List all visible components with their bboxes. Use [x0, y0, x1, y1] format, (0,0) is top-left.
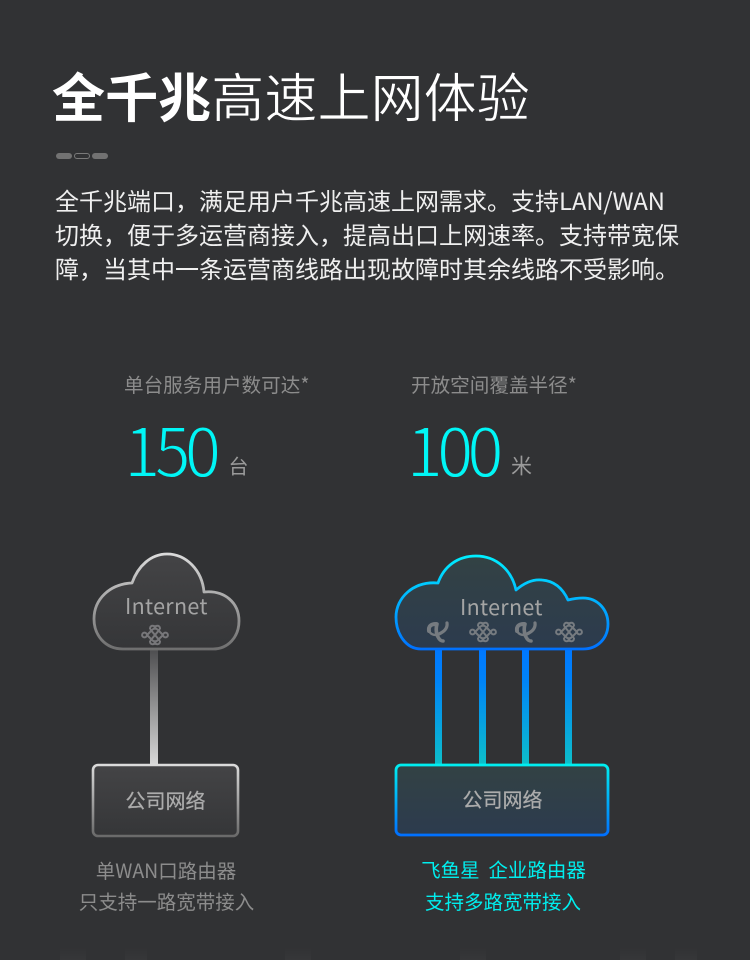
- faint bottom glow: [60, 947, 697, 960]
- caption: enterprise router: [421, 854, 586, 915]
- stat: open-space coverage radius: 开放空间覆盖半径*: [411, 369, 577, 398]
- stat: users per device: 单台服务用户数可达*: [124, 369, 310, 398]
- cloud label: Internet: [460, 591, 543, 622]
- diagram: multi-WAN router: [396, 556, 608, 835]
- connection line: single link: [150, 650, 158, 764]
- box: company network: [93, 765, 238, 836]
- box label: 公司网络: [462, 784, 542, 813]
- box label: 公司网络: [126, 785, 206, 814]
- caption: single WAN: [79, 855, 254, 915]
- title: 全千兆高速上网体验: [52, 56, 530, 133]
- stat: users per device: 150: [124, 398, 219, 497]
- stat: users per device: 台: [228, 450, 248, 480]
- cloud label: Internet: [125, 590, 208, 621]
- stat: open-space coverage radius: 100: [406, 398, 501, 497]
- caption: single WAN: 单WAN口路由器: [96, 855, 236, 884]
- intro paragraph: [55, 182, 679, 285]
- connection lines: four links: [435, 650, 572, 764]
- cloud: multi-line internet: [396, 556, 608, 649]
- icon: knot logo: [142, 626, 168, 644]
- diagram: single WAN router: [93, 554, 239, 836]
- caption: enterprise router: 飞鱼星 企业路由器: [421, 854, 586, 883]
- title pagination marks: [56, 153, 108, 159]
- stat: open-space coverage radius: 米: [511, 450, 532, 480]
- stat: users per device: [124, 369, 310, 497]
- caption: single WAN: 只支持一路宽带接入: [79, 886, 254, 915]
- intro paragraph: 全千兆端口，满足用户千兆高速上网需求。支持LAN/WAN: [55, 182, 665, 217]
- intro paragraph: 障，当其中一条运营商线路出现故障时其余线路不受影响。: [55, 250, 679, 285]
- caption: enterprise router: 支持多路宽带接入: [425, 886, 581, 915]
- cloud: single-line internet: [94, 554, 239, 649]
- intro paragraph: 切换，便于多运营商接入，提高出口上网速率。支持带宽保: [55, 216, 679, 251]
- box: company network: [396, 765, 608, 835]
- icon: carrier logos: [429, 623, 582, 641]
- stat: open-space coverage radius: [406, 369, 577, 497]
